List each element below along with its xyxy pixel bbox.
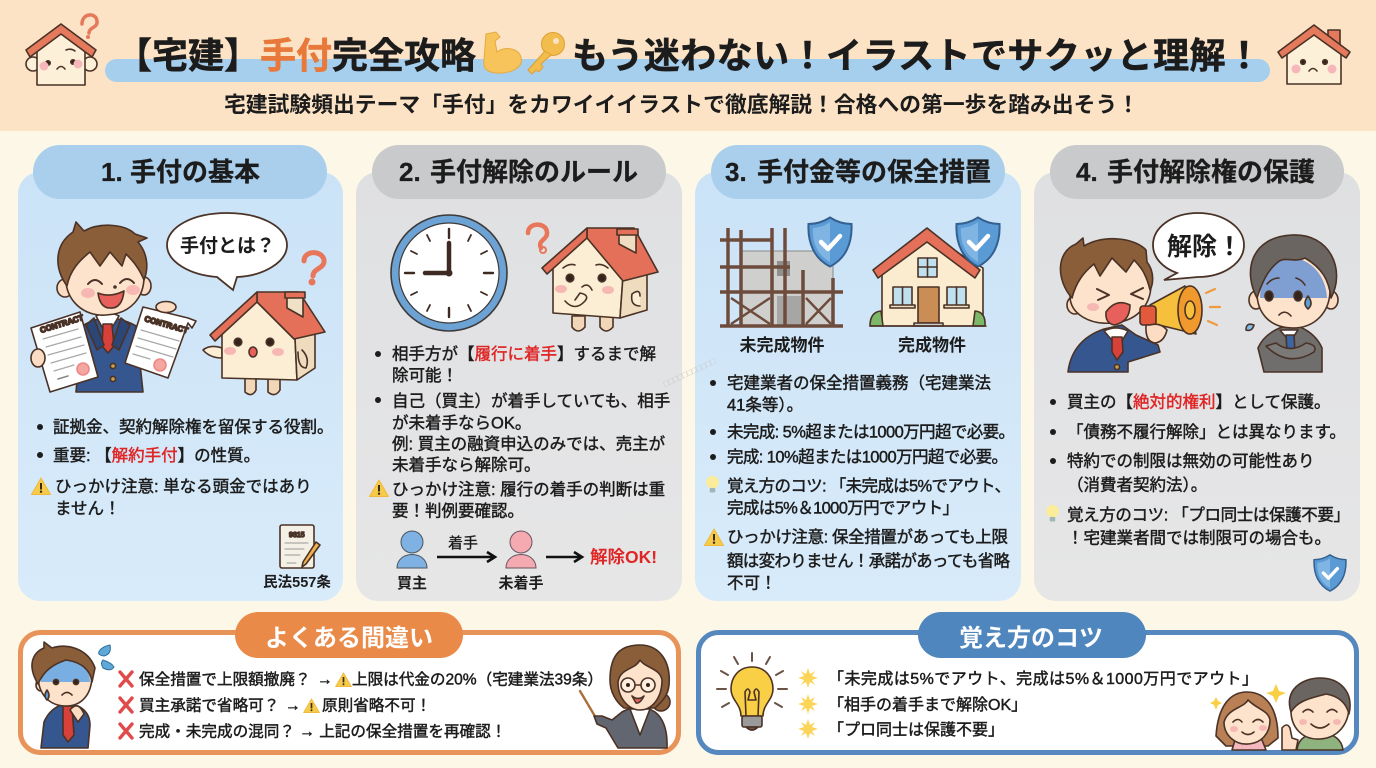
bullet list: 覚え方のコツ: 「未完成は5%でアウト、 [727,477,1011,496]
bullet list: 重要: 【解約手付】の性質。 [53,446,260,465]
title: 手付 [260,35,332,76]
icon: house with question [203,253,325,395]
icon: finished house [870,228,986,326]
heading: 4 [1050,145,1344,199]
speech bubble: 手付とは？ [180,235,275,257]
panel: 1 basics [18,145,343,601]
list: mistakes: 上限は代金の20%（宅建業法39条） [352,670,603,688]
contract left [31,312,98,392]
arrow: start [437,552,495,562]
bullet list: 41条等）。 [727,396,803,414]
list: mistakes [120,670,603,740]
icon: document and pen [280,525,320,568]
label: finished: 完成物件 [898,335,966,355]
panel: common mistakes [20,612,678,752]
panel: 4 right protection [1034,145,1360,601]
bullet list: 額は変わりません！承諾があっても省略 [727,552,1010,570]
heading: 2: 2. [399,157,421,187]
icon: left worried house [26,15,97,85]
icon: sweat drops [99,645,114,670]
heading: 3: 手付金等の保全措置 [757,157,991,187]
arrow: result [546,552,582,562]
bullet list: 不可！ [727,575,776,593]
flow diagram: 買主 [397,574,427,592]
bullet list: 完成: 10%超または1000万円超で必要。 [727,448,1008,467]
list: mistakes: → [285,698,301,714]
bullet list: 証拠金、契約解除権を留保する役割。 [53,418,334,436]
watermark: □□□□□□□□□□□ [662,356,717,389]
subtitle: 宅建試験頻出テーマ「手付」をカワイイイラストで徹底解説！合格への第一歩を踏み出そう！ [224,92,1139,117]
megaphone [1140,286,1202,343]
speech bubble: 解除！ [1167,233,1242,261]
contract left: CONTRACT [39,313,85,335]
icon: document and pen: 9615 [289,532,305,539]
bullet list: 買主の【絶対的権利】として保護。 [1067,393,1331,412]
title [116,32,1262,76]
heading pill: 覚え方のコツ [959,625,1103,652]
list: mistakes: 原則省略不可！ [322,696,431,714]
bullet list [32,418,334,518]
icon: lightbulb [717,653,787,730]
list: mistakes: → [317,672,333,688]
bullet list: ！宅建業者間では制限可の場合も。 [1067,529,1331,548]
icon: shield [808,218,852,266]
bullet list: 特約での制限は無効の可能性あり [1067,452,1314,471]
bullet list: が未着手ならOK。 [392,414,531,432]
person: not started [506,531,536,568]
bullet list: 要！判例要確認。 [392,502,524,520]
heading: 3: 3. [725,157,747,187]
icon: worried house [528,225,658,331]
bullet list: 除可能！ [392,366,458,385]
icon: shield [956,218,1000,266]
heading: 1: 手付の基本 [130,157,260,187]
flow diagram: 解除OK! [590,547,657,567]
list: tips: 「プロ同士は保護不要」 [828,721,1004,739]
title: 完全攻略 [332,35,476,76]
speech bubble [1153,213,1244,280]
bullet list [1046,393,1350,548]
heading: 4: 手付解除権の保護 [1107,157,1315,187]
bullet list: 宅建業者の保全措置義務（宅建業法 [727,374,991,392]
header band [0,0,1376,131]
flow diagram [397,531,657,592]
illustration: worried man [32,642,95,748]
bullet list: 覚え方のコツ: 「プロ同士は保護不要」 [1067,506,1350,525]
panel: 3 protection measures [695,145,1021,601]
bullet list: ひっかけ注意: 単なる頭金ではあり [55,477,312,496]
heading pill: よくある間違い [265,625,433,652]
heading: 1 [33,145,327,199]
illustration: happy couple [1216,678,1350,750]
flow diagram: 着手 [448,535,478,552]
person: buyer [397,531,427,568]
icon: unfinished building [720,228,843,326]
title: 【宅建】 [116,35,260,76]
list: mistakes: 完成・未完成の混同？ → 上記の保全措置を再確認！ [139,722,506,740]
heading: 2 [372,145,666,199]
icon: key [528,32,564,74]
contract right: CONTRACT [143,314,189,335]
bullet list: 相手方が【履行に着手】するまで解 [392,345,656,364]
illustration: shouting man [1060,238,1220,372]
illustration: worried man [1246,235,1338,372]
panel: 2 rules [356,145,682,601]
bullet list [704,374,1015,593]
bullet list: 例: 買主の融資申込のみでは、売主が [392,434,666,454]
icon: clock [391,215,507,331]
heading: 2: 手付解除のルール [430,157,638,187]
bullet list: 未着手なら解除可。 [392,456,540,474]
bullet list: ひっかけ注意: 履行の着手の判断は重 [392,480,665,499]
bullet list: 「債務不履行解除」とは異なります。 [1067,423,1346,442]
bullet list: （消費者契約法）。 [1067,476,1207,495]
list: mistakes: 保全措置で上限額撤廃？ [139,670,311,688]
bullet list: ません！ [55,500,121,518]
heading: 3 [711,145,1005,199]
speech bubble [167,213,287,290]
list: tips [798,668,1258,739]
icon: shield [1314,555,1346,591]
illustration: teacher [580,645,670,748]
heading pill [235,612,463,658]
title: もう迷わない！イラストでサクッと理解！ [572,35,1262,76]
list: tips: 「未完成は5%でアウト、完成は5%＆1000万円でアウト」 [828,670,1258,688]
heading: 1: 1. [101,157,123,187]
bullet list: ひっかけ注意: 保全措置があっても上限 [727,528,1008,547]
bullet list: 自己（買主）が着手していても、相手 [392,392,670,410]
heading pill [918,612,1146,658]
list: mistakes: 買主承諾で省略可？ [139,696,279,714]
panel: memory tips [698,612,1356,752]
icon: flexed arm [484,32,521,73]
bullet list [370,345,670,520]
bullet list: 未完成: 5%超または1000万円超で必要。 [727,423,1015,442]
flow diagram: 未着手 [498,574,544,592]
title highlight bar [105,59,1270,82]
label: unfinished: 未完成物件 [740,335,824,355]
law label: 民法557条 [263,574,331,591]
illustration: man with contracts [31,222,196,392]
icon: sparkles [1210,684,1286,710]
contract right [125,307,196,378]
icon: right sad house [1278,25,1350,84]
heading: 4: 4. [1076,157,1098,187]
bullet list: 完成は5%＆1000万円でアウト」 [727,499,959,518]
list: tips: 「相手の着手まで解除OK」 [828,696,1027,714]
